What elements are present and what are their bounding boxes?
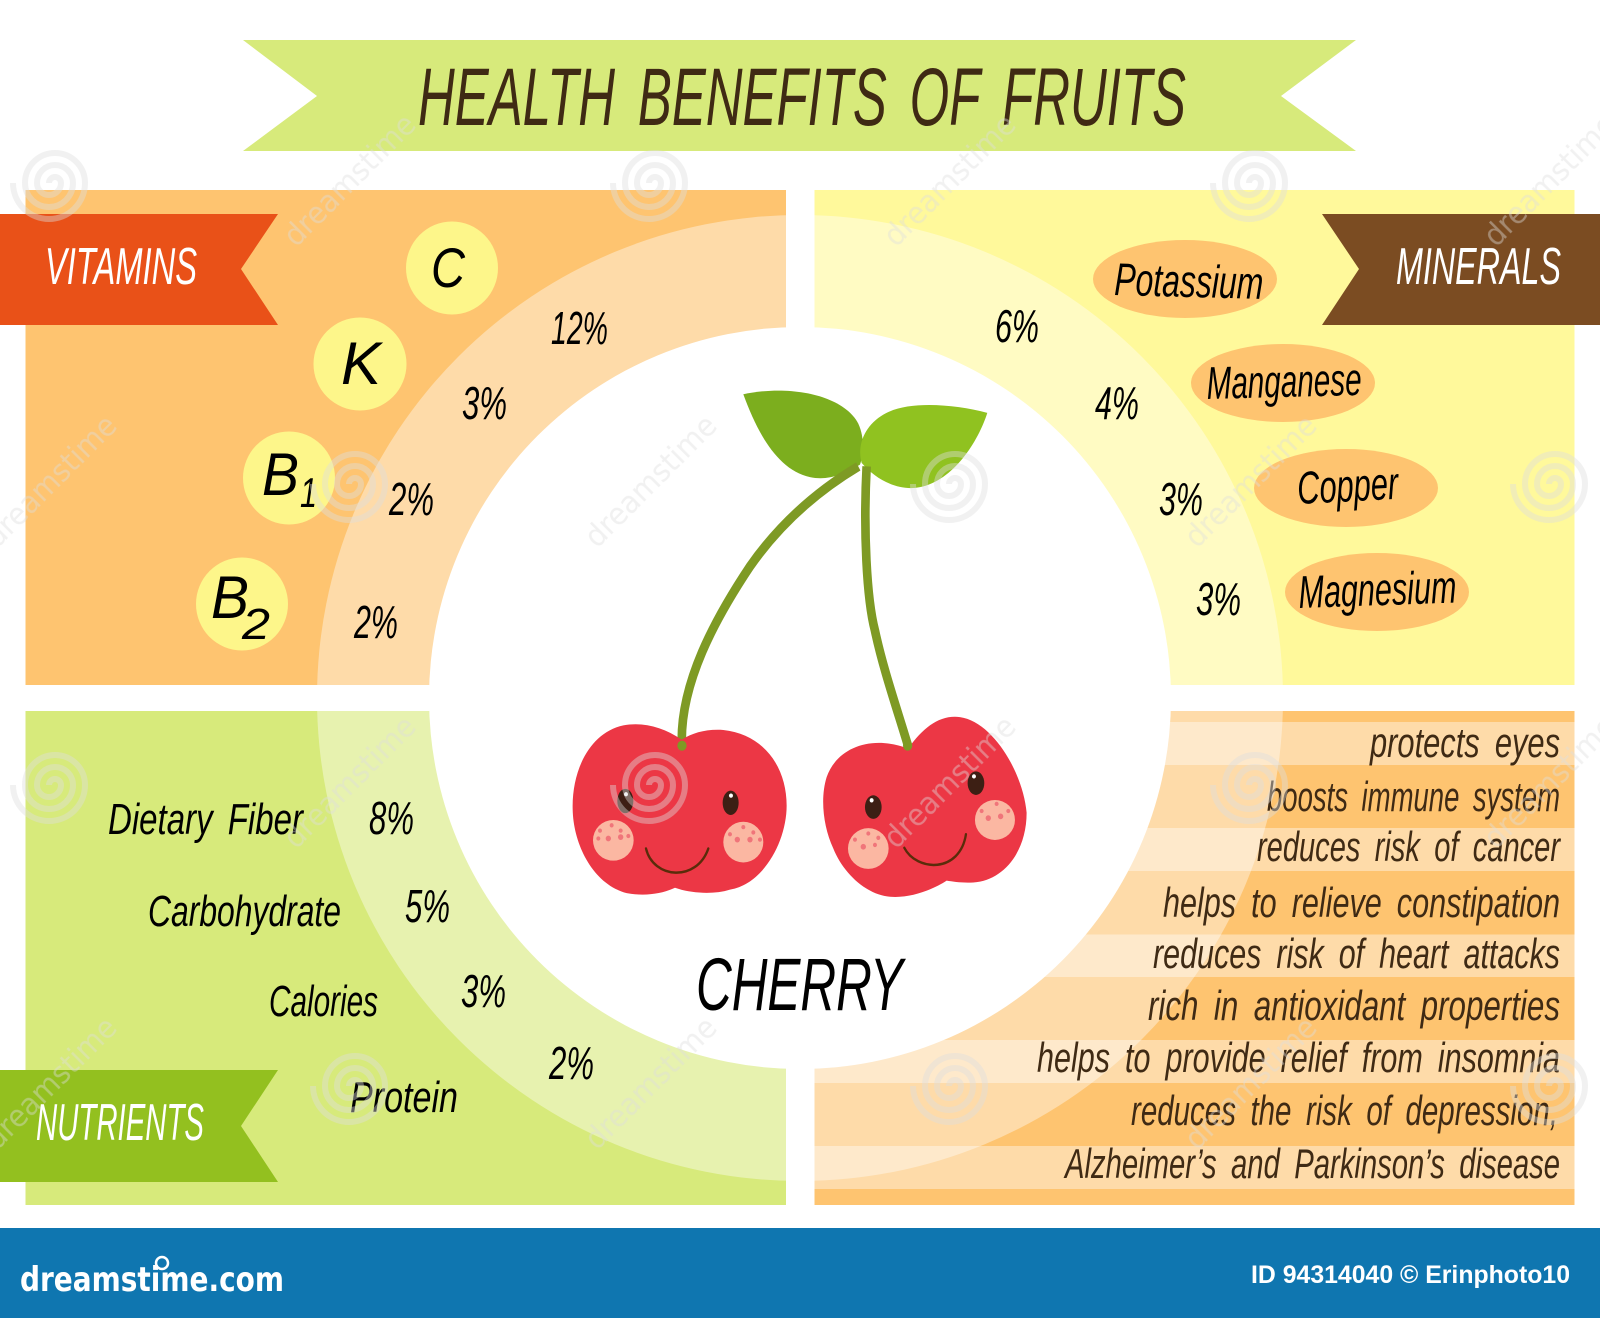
vitamin percentages: 3% — [462, 377, 507, 429]
vitamin percentages: 2% — [388, 473, 434, 525]
mouths — [646, 834, 966, 873]
vitamin percentages: 2% — [353, 596, 398, 648]
right leaf — [860, 405, 987, 488]
watermark spirals — [13, 153, 1585, 1122]
watermark text: dreamstime — [578, 408, 724, 555]
watermark text: dreamstime — [578, 1010, 724, 1157]
stem joints — [677, 741, 912, 751]
footer logo: dreamstime.com — [20, 1260, 284, 1300]
mineral percentages: 3% — [1196, 573, 1241, 625]
vitamin badge K: K — [341, 330, 384, 397]
mineral percentages — [995, 300, 1241, 625]
right stem — [865, 466, 908, 747]
nutrient labels: Dietary Fiber — [108, 795, 305, 844]
nutrient percentages: 8% — [369, 792, 414, 844]
footer image id: ID 94314040 © Erinphoto10 — [1251, 1261, 1570, 1289]
watermark text: dreamstime — [277, 709, 423, 856]
vitamin badge B1: 1 — [300, 469, 317, 516]
cheek freckles — [596, 802, 1010, 850]
ribbon: vitamins — [0, 214, 278, 325]
mineral: copper — [1254, 449, 1438, 527]
nutrient labels: Calories — [269, 977, 378, 1026]
nutrient labels: Protein — [350, 1073, 458, 1122]
ribbon: nutrients: NUTRIENTS — [36, 1094, 204, 1152]
nutrient labels: Carbohydrate — [148, 887, 341, 936]
eyes — [617, 771, 984, 819]
mineral: manganese: Manganese — [1206, 353, 1362, 409]
vitamin badge K — [314, 318, 406, 410]
mineral percentages: 3% — [1159, 473, 1203, 525]
footer bar — [0, 1228, 1600, 1318]
fruit name: CHERRY — [696, 943, 906, 1026]
vitamin percentages — [353, 302, 608, 648]
mineral: magnesium — [1285, 553, 1469, 631]
right cherry — [823, 717, 1027, 897]
benefit stripes — [814, 722, 1574, 1189]
eye highlights — [624, 774, 976, 802]
nutrient percentages: 5% — [405, 880, 450, 932]
watermark text: dreamstime — [877, 107, 1023, 254]
watermark text: dreamstime — [877, 709, 1023, 856]
ring around central circle — [317, 215, 1283, 1181]
mineral: potassium — [1093, 240, 1277, 318]
icon: cherries illustration — [573, 391, 1027, 897]
nutrient percentages: 2% — [548, 1037, 594, 1089]
watermark text: dreamstime — [1178, 1010, 1324, 1157]
vitamin badge B1: B — [262, 441, 299, 508]
vitamin badge B1 — [243, 432, 335, 524]
nutrient percentages — [369, 792, 594, 1089]
left leaf — [743, 391, 863, 478]
vitamin badge B2: B — [211, 564, 249, 631]
cheeks — [593, 800, 1015, 869]
watermark text: dreamstime — [1178, 408, 1324, 555]
mineral: manganese — [1191, 344, 1375, 422]
ribbon: vitamins: VITAMINS — [45, 238, 197, 296]
vitamin badge B2 — [196, 558, 288, 650]
watermark text: dreamstime — [277, 107, 423, 254]
footer logo swirl — [156, 1257, 168, 1269]
title banner — [243, 40, 1356, 151]
panel: vitamins background — [26, 190, 786, 685]
mineral percentages: 6% — [995, 300, 1039, 352]
ribbon: minerals — [1322, 214, 1600, 325]
mineral: magnesium: Magnesium — [1298, 561, 1457, 618]
benefits list — [1037, 719, 1561, 1187]
left cherry — [573, 724, 787, 895]
panel: benefits background — [814, 711, 1574, 1205]
panel: nutrients background — [26, 711, 786, 1205]
mineral: potassium: Potassium — [1114, 253, 1264, 309]
watermark text — [0, 107, 1600, 1157]
mineral percentages: 4% — [1095, 377, 1139, 429]
left stem — [682, 466, 858, 749]
mineral: copper: Copper — [1296, 457, 1401, 514]
nutrient percentages: 3% — [461, 965, 506, 1017]
nutrient labels — [108, 795, 458, 1122]
panel: minerals background — [814, 190, 1574, 685]
vitamin percentages: 12% — [551, 302, 608, 354]
vitamin badge B2: 2 — [241, 600, 270, 649]
central white circle — [429, 327, 1171, 1069]
ribbon: nutrients — [0, 1070, 278, 1182]
vitamin badge C — [406, 222, 498, 314]
vitamin badge C: C — [431, 236, 465, 299]
